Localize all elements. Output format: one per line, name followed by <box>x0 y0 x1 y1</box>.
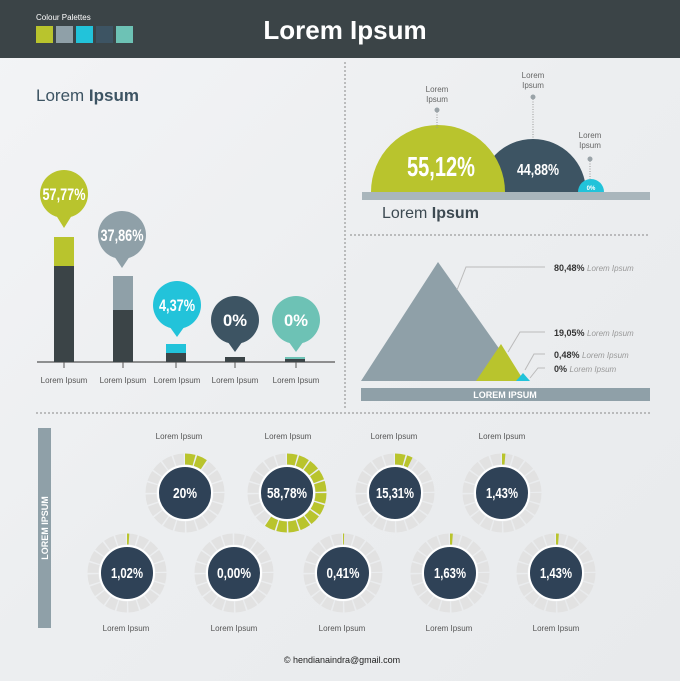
ring charts: 1,63% <box>434 565 466 582</box>
bar chart: Lorem Ipsum <box>100 376 147 385</box>
bubble 0% teal: 0% <box>284 311 308 330</box>
heading: left panel: Lorem Ipsum <box>36 86 139 105</box>
bubble 0% teal <box>272 296 320 352</box>
bar chart: Lorem Ipsum <box>154 376 201 385</box>
ring charts: 0,00% <box>217 565 251 582</box>
ring charts: 20% <box>173 485 197 502</box>
side label bar <box>38 428 51 628</box>
ring charts: Lorem Ipsum <box>103 624 150 633</box>
semicircle chart: Ipsum <box>426 95 448 104</box>
triangle chart: LOREM IPSUM <box>473 390 537 400</box>
semicircle chart: Lorem <box>522 71 545 80</box>
ring charts: Lorem Ipsum <box>156 432 203 441</box>
ring charts: Lorem Ipsum <box>426 624 473 633</box>
palette label: Colour Palettes <box>36 13 91 22</box>
palette swatches <box>36 26 133 43</box>
ring charts: Lorem Ipsum <box>319 624 366 633</box>
ring charts: 1,43% <box>540 565 572 582</box>
ring charts: Lorem Ipsum <box>211 624 258 633</box>
ring charts: 0,41% <box>326 565 360 582</box>
ring charts: 58,78% <box>267 485 307 502</box>
side label bar: LOREM IPSUM <box>40 496 50 560</box>
ring charts: Lorem Ipsum <box>265 432 312 441</box>
triangle chart: 19,05% Lorem Ipsum <box>554 328 634 338</box>
ring charts: Lorem Ipsum <box>371 432 418 441</box>
ring charts <box>93 432 590 633</box>
semicircle chart: Lorem <box>579 131 602 140</box>
bubble 0% dark: 0% <box>223 311 247 330</box>
bubble 57,77%: 57,77% <box>42 185 86 204</box>
bar chart <box>37 170 335 385</box>
bubble 37,86%: 37,86% <box>100 226 144 245</box>
semicircle chart: 55,12% <box>407 151 475 182</box>
triangle chart: 0% Lorem Ipsum <box>554 364 617 374</box>
bubble 4,37%: 4,37% <box>159 296 195 315</box>
semicircle chart: 44,88% <box>517 162 559 179</box>
semicircle chart: Lorem <box>426 85 449 94</box>
triangle chart <box>361 262 650 401</box>
triangle chart: 0,48% Lorem Ipsum <box>554 350 629 360</box>
bubble 0% dark <box>211 296 259 352</box>
ring charts: Lorem Ipsum <box>479 432 526 441</box>
triangle chart: 80,48% Lorem Ipsum <box>554 263 634 273</box>
bar chart: Lorem Ipsum <box>273 376 320 385</box>
bubble 57,77% <box>40 170 88 228</box>
title: Lorem Ipsum <box>263 15 427 45</box>
header <box>0 0 680 58</box>
semicircle chart: 0% <box>587 186 596 192</box>
bar chart: Lorem Ipsum <box>41 376 88 385</box>
semicircle chart: Ipsum <box>522 81 544 90</box>
ring charts: 15,31% <box>376 485 414 502</box>
ring charts: Lorem Ipsum <box>533 624 580 633</box>
heading: semicircle: Lorem Ipsum <box>382 205 479 222</box>
footer credit: © hendianaindra@gmail.com <box>284 655 400 665</box>
bubble 4,37% <box>153 281 201 337</box>
semicircle chart: Ipsum <box>579 141 601 150</box>
semicircle chart <box>362 71 650 200</box>
ring charts: 1,43% <box>486 485 518 502</box>
ring charts: 1,02% <box>111 565 143 582</box>
bubble 37,86% <box>98 211 146 268</box>
bar chart: Lorem Ipsum <box>212 376 259 385</box>
